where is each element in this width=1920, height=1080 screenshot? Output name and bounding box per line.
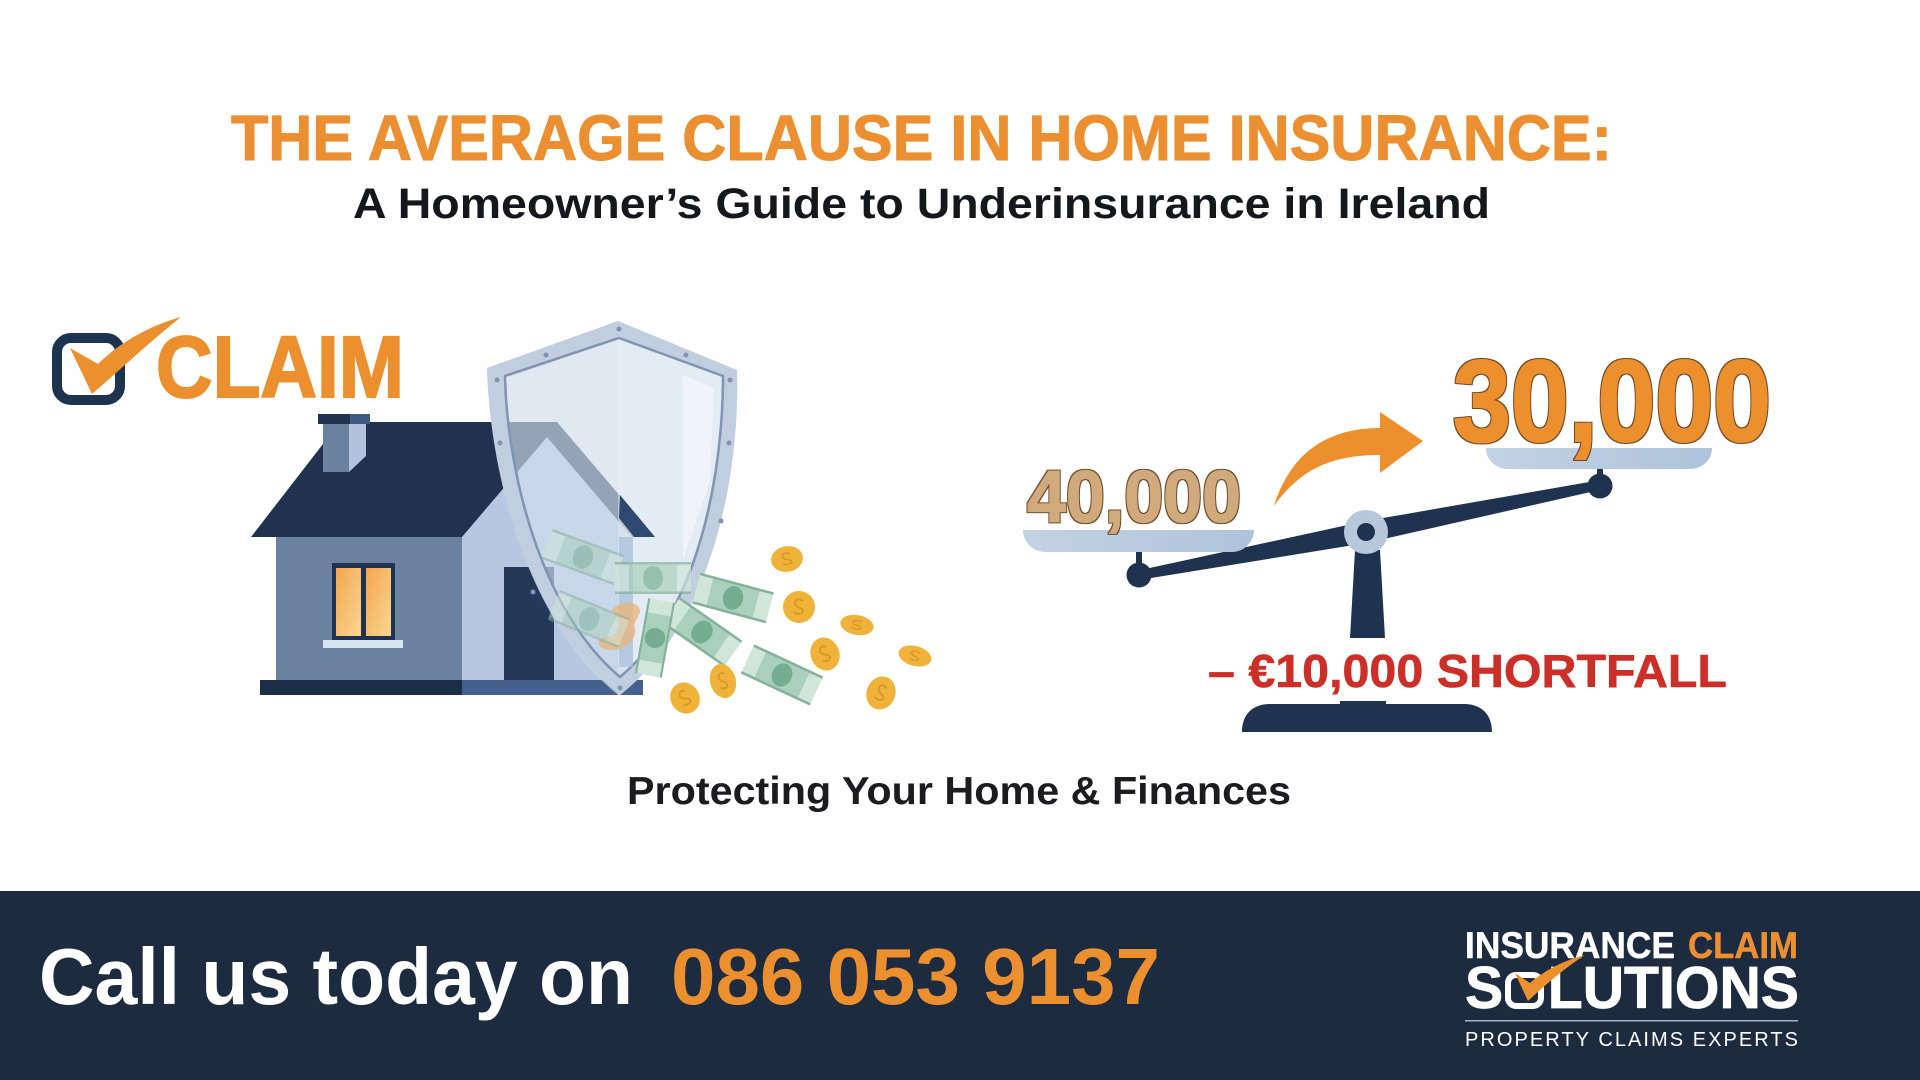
door — [504, 567, 554, 680]
left pan — [1023, 530, 1254, 552]
logo: claim checkmark — [57, 317, 404, 416]
shield — [487, 321, 737, 695]
gable wall — [462, 437, 632, 680]
company logo: SOLUTIONS — [1465, 955, 1799, 1021]
shield rim — [487, 321, 737, 695]
right pan — [1486, 448, 1712, 469]
logo: claim checkmark: CLAIM — [156, 319, 404, 416]
scale beam — [1145, 481, 1595, 579]
subtitle: A Homeowner’s Guide to Underinsurance in Ireland — [353, 180, 1490, 228]
caption: Protecting Your Home & Finances — [627, 770, 1291, 813]
company logo: PROPERTY CLAIMS EXPERTS — [1465, 1029, 1798, 1051]
arrow — [1274, 412, 1423, 506]
banknotes — [542, 529, 823, 706]
chimney — [318, 414, 370, 472]
shortfall label: – €10,000 SHORTFALL — [1208, 645, 1727, 697]
left wall — [276, 537, 462, 680]
footer bar — [0, 891, 1920, 1080]
company logo: CLAIM — [1688, 925, 1798, 966]
company logo — [1465, 925, 1799, 1051]
beam ends — [1126, 469, 1612, 588]
company logo: INSURANCE — [1465, 925, 1675, 966]
coins — [665, 544, 934, 719]
title: THE AVERAGE CLAUSE IN HOME INSURANCE: — [231, 102, 1612, 174]
orange blotch — [599, 603, 640, 650]
phone number: 086 053 9137 — [671, 932, 1160, 1021]
value: 40,000: 40,000 — [1027, 457, 1241, 538]
window — [323, 563, 403, 648]
scale base — [1242, 701, 1492, 732]
money flying out — [542, 529, 934, 719]
scale stand — [1350, 550, 1385, 638]
balance scale — [1023, 448, 1712, 732]
illustration: house — [251, 414, 655, 695]
house roof — [251, 422, 655, 537]
call to action: Call us today on — [39, 932, 633, 1021]
pivot — [1344, 510, 1388, 554]
foundation — [260, 680, 643, 695]
value: 30,000: 30,000 — [1453, 336, 1771, 466]
